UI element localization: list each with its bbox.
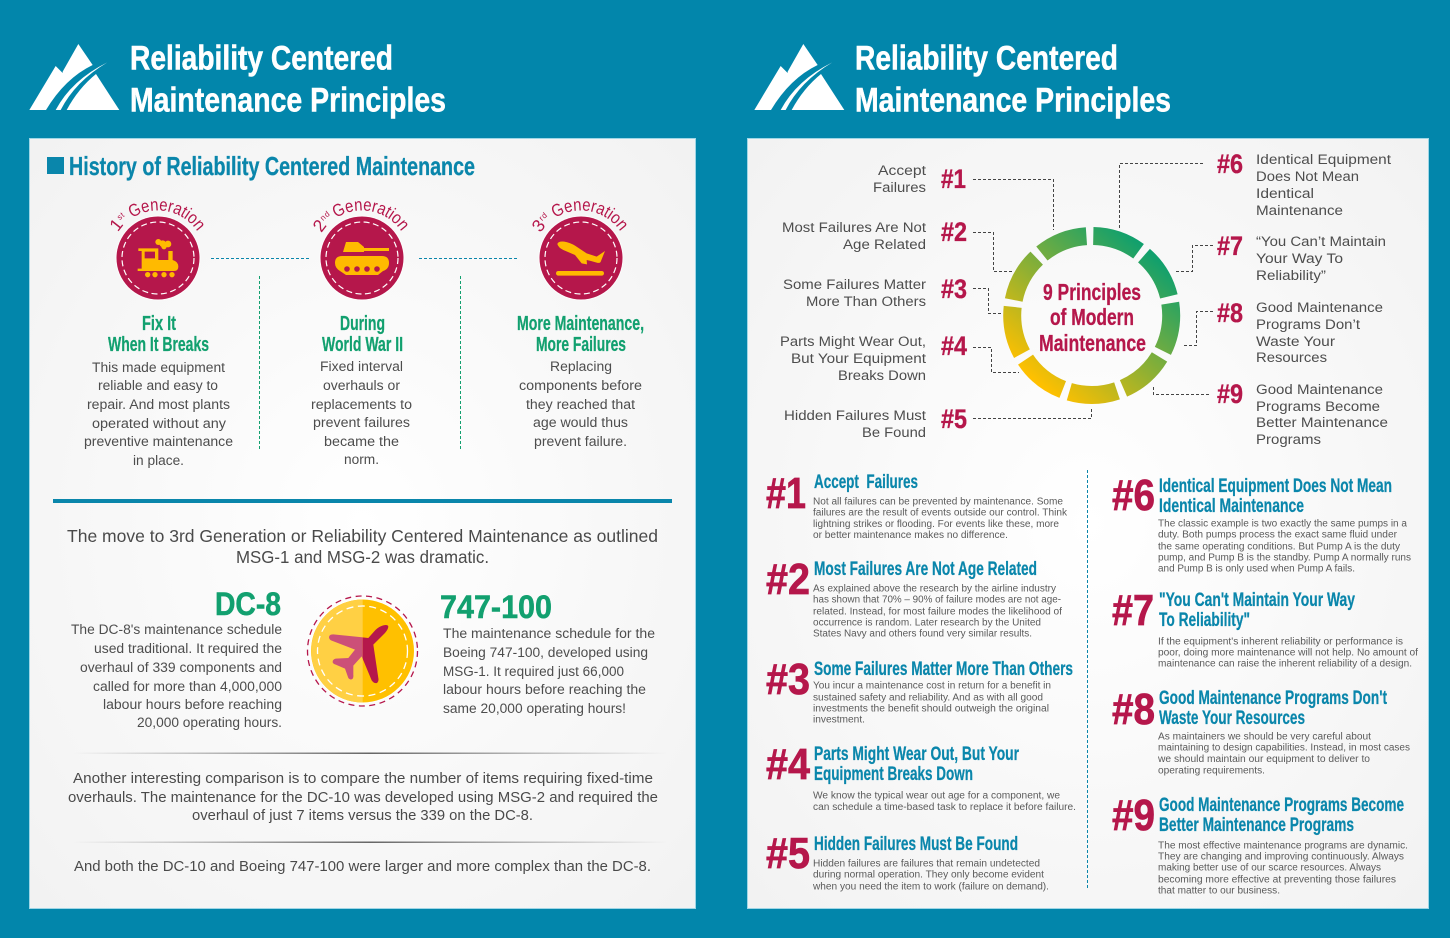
label #3: More Than Others (806, 294, 926, 309)
badge: 3rd generation: Generation (552, 201, 626, 231)
detail #2: Most Failures Are Not Age Related (814, 558, 1037, 580)
detail #3: Some Failures Matter More Than Others (814, 658, 1073, 680)
badge: 1st generation: 1 (110, 220, 124, 232)
detail #3 (766, 655, 1073, 726)
comparison: DC-8: labour hours before reaching (103, 697, 282, 712)
text block: third generation: Replacing (550, 359, 612, 374)
detail #5: #5 (766, 829, 810, 878)
badge: 3rd generation: 3 (532, 220, 544, 232)
icon: mountain logo (754, 44, 844, 110)
detail #6: and Pump B is only used when Pump A fails. (1158, 564, 1355, 574)
label #9 (1217, 379, 1388, 447)
left header (29, 40, 446, 120)
comparison paragraph: Another interesting comparison is to compare the number of items requiring fixed-time (73, 770, 653, 787)
badge: 2nd generation (314, 201, 408, 300)
label #4 (780, 331, 967, 383)
badge: 1st generation: st (118, 212, 125, 220)
detail #6: Identical Maintenance (1159, 495, 1304, 517)
detail #2: #2 (766, 555, 810, 604)
text block: first generation: reliable and easy to (98, 378, 218, 393)
detail #1: failures are the result of events outside our control. Think (813, 508, 1067, 518)
detail #1 (766, 469, 1067, 541)
text block: third generation (517, 313, 644, 449)
label #9: #9 (1217, 379, 1243, 409)
label #6: Identical (1256, 186, 1314, 201)
text block: second generation: overhauls or (323, 378, 401, 393)
text block: second generation: norm. (344, 452, 379, 467)
detail #7: If the equipment's inherent reliability or performance is (1158, 636, 1403, 648)
badge: 2nd generation: 2 (314, 220, 327, 232)
icon: plane taking off (556, 242, 605, 276)
badge: 3rd generation: rd (540, 212, 548, 221)
detail #1: Accept Failures (814, 471, 918, 493)
label #1: Failures (873, 180, 926, 195)
comparison paragraph: overhauls. The maintenance for the DC-10 was developed using MSG-2 and required the (68, 789, 658, 806)
detail #4: can schedule a time-based task to replace it before failure. (813, 802, 1076, 813)
text block: first generation: This made equipment (92, 360, 225, 375)
detail #5: Hidden failures are failures that remain undetected (813, 858, 1040, 870)
text block: third generation: prevent failure. (534, 434, 627, 449)
label #2: Most Failures Are Not (782, 220, 926, 235)
label #2: Age Related (843, 237, 926, 252)
badge: 2nd generation: nd (320, 210, 330, 221)
label #1: Accept (878, 163, 926, 178)
label #2 (782, 217, 967, 252)
label #7: Reliability” (1256, 268, 1326, 283)
label #4: Breaks Down (838, 368, 926, 383)
text block: second generation: replacements to (311, 397, 412, 412)
text block: second generation: During (340, 313, 385, 335)
text block: first generation: operated without any (92, 416, 226, 431)
detail #8: #8 (1112, 685, 1155, 734)
detail #6: pump, and Pump B is the standby. Pump A normally runs (1158, 552, 1411, 564)
label #4: Parts Might Wear Out, (780, 334, 926, 349)
chart: principles ring: of Modern (1050, 304, 1134, 330)
detail #9: making better use of our scarce resources. Always (1158, 862, 1381, 874)
detail #9: becoming more effective at preventing those failures (1158, 874, 1396, 886)
label #1 (873, 163, 966, 195)
comparison paragraph (68, 770, 658, 824)
text block: first generation: Fix It (142, 313, 176, 335)
text block: first generation: in place. (133, 453, 184, 468)
detail #8: Waste Your Resources (1159, 707, 1305, 729)
comparison: 747-100: labour hours before reaching the (443, 682, 646, 697)
detail #1: or better maintenance makes no difference. (813, 530, 1008, 541)
label #9: Better Maintenance (1256, 415, 1388, 430)
detail #9: #9 (1112, 791, 1155, 840)
detail #1: #1 (766, 469, 806, 518)
detail #2: occurrence is random. Later research by the United (813, 618, 1041, 628)
detail #7: "You Can't Maintain Your Way (1159, 589, 1355, 611)
label #9: Good Maintenance (1256, 382, 1383, 397)
comparison: DC-8: The DC-8's maintenance schedule (71, 622, 282, 637)
label #7: “You Can’t Maintain (1256, 234, 1386, 249)
detail #9: They are changing and improving continuously. Always (1158, 852, 1404, 862)
chart: principles ring: 9 Principles (1043, 279, 1141, 305)
detail #4: We know the typical wear out age for a component, we (813, 790, 1061, 802)
chart: principles ring (1012, 236, 1171, 395)
intro text: The move to 3rd Generation or Reliability Centered Maintenance as outlined (67, 526, 658, 546)
text block: first generation: When It Breaks (108, 334, 209, 356)
badge: 1st generation: Generation (128, 201, 204, 231)
connectors between generations (211, 258, 517, 449)
detail #9: that matter to our business. (1158, 886, 1280, 896)
comparison: 747-100: Boeing 747-100, developed using (443, 645, 648, 660)
label #6 (1217, 149, 1391, 218)
comparison: 747-100: The maintenance schedule for the (443, 626, 655, 641)
detail #4 (766, 740, 1076, 813)
detail #8: As maintainers we should be very careful about (1158, 732, 1371, 742)
badge: 2nd generation: Generation (332, 201, 408, 231)
detail #7: To Reliability" (1159, 609, 1250, 631)
detail #2: related. Instead, for most failure modes the likelihood of (813, 606, 1062, 618)
detail #2: States Navy and others found very similar results. (813, 628, 1032, 640)
detail #2: has shown that 70% – 90% of failure modes are not age- (813, 594, 1061, 606)
label #8: Resources (1256, 350, 1327, 365)
detail #9: Better Maintenance Programs (1159, 814, 1354, 836)
detail #8: we should maintain our equipment to deliver to (1157, 754, 1371, 765)
detail #6: #6 (1112, 471, 1155, 520)
detail #4: Equipment Breaks Down (814, 763, 973, 785)
label #9: Programs (1256, 432, 1321, 447)
text block: third generation: More Failures (536, 334, 626, 356)
label #8: Good Maintenance (1256, 300, 1383, 315)
text block: first generation (84, 313, 233, 468)
detail #8 (1112, 685, 1410, 776)
detail #8: maintaining to design capabilities. Instead, in most cases (1158, 742, 1410, 754)
label #3: #3 (941, 274, 967, 304)
label #3: Some Failures Matter (783, 277, 927, 292)
text block: third generation: age would thus (533, 415, 628, 430)
detail #9: The most effective maintenance programs are dynamic. (1158, 840, 1408, 852)
text block: second generation: World War II (322, 334, 403, 356)
comparison: 747-100: same 20,000 operating hours! (443, 701, 626, 716)
icon: tank (335, 242, 389, 275)
comparison: DC-8: DC-8 (215, 586, 281, 622)
label #8: #8 (1217, 298, 1243, 328)
panel: nine principles (748, 138, 1428, 908)
detail #3: investments the benefit should outweigh the original (813, 704, 1049, 714)
comparison: DC-8: used traditional. It required the (94, 641, 282, 656)
label #8: Waste Your (1256, 334, 1336, 349)
detail #3: You incur a maintenance cost in return for a benefit in (813, 680, 1051, 692)
label #8: Programs Don’t (1256, 317, 1360, 332)
detail #5: during normal operation. They only become evident (813, 870, 1044, 880)
label #6: Does Not Mean (1256, 169, 1359, 184)
detail #3: investment. (813, 714, 865, 726)
text block: second generation: became the (324, 434, 399, 449)
detail #6: the same operating conditions. But Pump A is the duty (1158, 542, 1400, 552)
text block: second generation (311, 313, 412, 467)
label #8 (1217, 298, 1383, 365)
comparison: DC-8: 20,000 operating hours. (137, 715, 282, 730)
detail #3: sustained safety and reliability. And as with all good (813, 692, 1043, 704)
detail #2 (766, 555, 1062, 640)
chart: principles ring: Maintenance (1039, 330, 1146, 356)
comparison: DC-8: overhaul of 339 components and (80, 660, 282, 675)
label #5 (784, 404, 967, 440)
label #7 (1217, 231, 1386, 283)
label #6: Identical Equipment (1256, 152, 1391, 167)
text block: third generation: they reached that (526, 397, 635, 412)
title: Reliability Centered (130, 40, 393, 78)
label #5: Be Found (862, 425, 926, 440)
detail #3: #3 (766, 655, 810, 704)
label #2: #2 (941, 217, 967, 247)
comparison: 747-100 (440, 589, 655, 716)
label #5: #5 (941, 404, 967, 434)
detail #6 (1112, 471, 1411, 574)
icon: mountain logo (29, 44, 119, 110)
comparison: 747-100: MSG-1. It required just 66,000 (443, 664, 624, 679)
text block: first generation: repair. And most plants (87, 397, 230, 412)
label #3 (783, 274, 967, 309)
label #7: Your Way To (1256, 251, 1343, 266)
label #4: #4 (941, 331, 967, 361)
label #6: Maintenance (1256, 203, 1343, 218)
detail #5: when you need the item to work (failure on demand). (812, 882, 1049, 892)
text block: third generation: components before (519, 378, 642, 393)
detail #7: #7 (1112, 586, 1154, 635)
label #9: Programs Become (1256, 399, 1380, 414)
section heading: History of Reliability Centered Maintenance (69, 151, 475, 181)
comparison: 747-100: 747-100 (440, 589, 552, 625)
text block: second generation: Fixed interval (320, 359, 403, 374)
label #5: Hidden Failures Must (784, 408, 926, 423)
text block: second generation: prevent failures (313, 415, 410, 430)
comparison paragraph: overhaul of just 7 items versus the 339 on the DC-8. (192, 807, 533, 824)
detail #6: The classic example is two exactly the same pumps in a (1158, 518, 1408, 530)
detail #8: operating requirements. (1158, 766, 1265, 776)
text block: first generation: preventive maintenance (84, 434, 233, 449)
label #4: But Your Equipment (791, 351, 926, 366)
detail #1: lightning strikes or flooding. For events like these, more (813, 519, 1060, 530)
panel: history (29, 138, 696, 909)
detail #5: Hidden Failures Must Be Found (814, 833, 1018, 855)
detail #9 (1112, 791, 1408, 896)
detail #4: #4 (766, 740, 810, 789)
comparison: DC-8: called for more than 4,000,000 (93, 679, 282, 694)
connector lines (973, 164, 1213, 418)
title: Maintenance Principles (130, 82, 446, 120)
detail #1: Not all failures can be prevented by maintenance. Some (813, 496, 1064, 508)
closing statement: And both the DC-10 and Boeing 747-100 were larger and more complex than the DC-8. (74, 858, 651, 875)
detail #4: Parts Might Wear Out, But Your (814, 743, 1019, 765)
detail #7 (1112, 586, 1418, 670)
badge: 1st generation (110, 201, 204, 300)
label #1: #1 (941, 164, 966, 194)
intro text: MSG-1 and MSG-2 was dramatic. (236, 547, 489, 567)
icon: airplane medallion (308, 596, 418, 706)
detail #5 (766, 829, 1049, 892)
text block: third generation: More Maintenance, (517, 313, 644, 335)
detail #2: As explained above the research by the airline industry (813, 584, 1056, 594)
title: Reliability Centered (855, 40, 1118, 78)
badge: 3rd generation (532, 201, 626, 300)
detail #7: maintenance can raise the inherent reliability of a design. (1158, 658, 1412, 670)
detail #6: duty. Both pumps process the exact same fluid under (1158, 530, 1398, 540)
title: Maintenance Principles (855, 82, 1171, 120)
icon: train (138, 239, 178, 277)
label #6: #6 (1217, 149, 1243, 179)
right header (754, 40, 1171, 120)
title (130, 40, 446, 120)
comparison: DC-8 (71, 586, 282, 730)
title (855, 40, 1171, 120)
detail #7: poor, doing more maintenance will not help. No amount of (1158, 648, 1418, 658)
intro text (67, 526, 658, 567)
label #7: #7 (1217, 231, 1243, 261)
